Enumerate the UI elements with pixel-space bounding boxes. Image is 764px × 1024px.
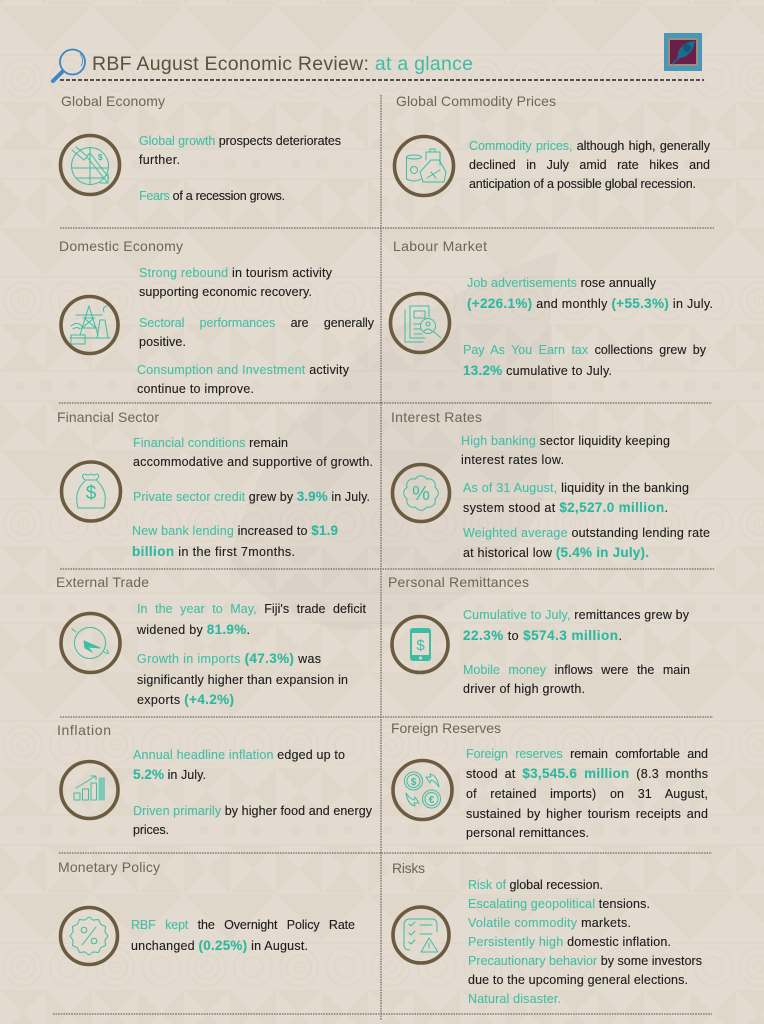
heading: inflation: Inflation xyxy=(57,722,111,738)
heading: financial sector: Financial Sector xyxy=(57,409,159,425)
icon: declining globe: $ xyxy=(98,153,103,162)
text: global commodity prices: declined in July amid rate hikes and xyxy=(469,158,710,172)
icon: money bag: $ xyxy=(86,483,97,504)
text: foreign reserves: personal remittances. xyxy=(466,826,589,840)
text: global economy: Global growth prospects deteriorates xyxy=(139,134,341,148)
text: domestic economy: positive. xyxy=(139,335,186,349)
text: global economy xyxy=(139,134,341,203)
panel: financial sector xyxy=(57,409,373,559)
text: inflation: Annual headline inflation edged up to xyxy=(133,748,345,762)
text: external trade: widened by 81.9%. xyxy=(136,622,250,637)
text: labour market xyxy=(463,276,713,378)
text: inflation: Driven primarily by higher food and energy xyxy=(133,804,373,818)
text: external trade: significantly higher than expansion in xyxy=(137,673,348,687)
text: financial sector: New bank lending increased to $1.9 xyxy=(132,523,338,538)
text: interest rates: interest rates low. xyxy=(461,453,564,467)
heading: personal remittances: Personal Remittances xyxy=(388,574,529,590)
text: financial sector: Financial conditions remain xyxy=(133,436,288,450)
text: risks: Precautionary behavior by some investors xyxy=(468,954,702,968)
text: interest rates xyxy=(461,434,710,560)
text: global commodity prices: anticipation of a possible global recession. xyxy=(469,177,696,191)
panel: inflation xyxy=(57,722,373,837)
heading: interest rates: Interest Rates xyxy=(391,409,482,425)
heading: global economy: Global Economy xyxy=(61,93,165,109)
text: foreign reserves: sustained by higher tourism receipts and xyxy=(466,807,708,821)
text: interest rates: system stood at $2,527.0 million. xyxy=(463,500,668,515)
heading: risks: Risks xyxy=(392,860,425,876)
text: risks: Persistently high domestic inflation. xyxy=(468,935,671,949)
text: risks: Volatile commodity markets. xyxy=(468,916,631,930)
text: external trade: Growth in imports (47.3%) was xyxy=(137,651,321,666)
text: global commodity prices: Commodity prices, although high, generally xyxy=(469,139,711,153)
icon: magnifying glass xyxy=(53,50,85,81)
text: interest rates: at historical low (5.4% in July). xyxy=(463,545,649,560)
icon: rising bar chart xyxy=(61,762,118,818)
text: risks: due to the upcoming general elections. xyxy=(468,973,688,987)
icon: commodities xyxy=(394,136,454,196)
heading: labour market: Labour Market xyxy=(393,238,487,254)
panel: domestic economy xyxy=(59,238,375,396)
panel: labour market xyxy=(390,238,713,378)
icon: percent badge: % xyxy=(412,483,430,505)
icon: plane around globe xyxy=(61,614,120,672)
icon: job search document xyxy=(390,294,450,352)
text: domestic economy: Strong rebound in tourism activity xyxy=(139,266,333,280)
icon: mobile money xyxy=(392,616,448,672)
text: financial sector: billion in the first 7months. xyxy=(132,544,295,559)
text: financial sector xyxy=(132,436,373,559)
text: labour market: 13.2% cumulative to July. xyxy=(463,363,612,378)
text: personal remittances: 22.3% to $574.3 million. xyxy=(463,628,622,643)
panel: personal remittances xyxy=(388,574,690,696)
text: risks: Risk of global recession. xyxy=(468,878,603,892)
text: interest rates: As of 31 August, liquidity in the banking xyxy=(463,481,689,495)
panel: foreign reserves xyxy=(391,720,708,840)
text: interest rates: High banking sector liquidity keeping xyxy=(461,434,670,448)
icon: money bag xyxy=(62,462,120,521)
text: personal remittances: driver of high growth. xyxy=(463,682,585,696)
text: inflation: 5.2% in July. xyxy=(133,767,206,782)
text: global economy: Fears of a recession grows. xyxy=(139,189,285,203)
icon: energy tower and laptop xyxy=(61,296,118,354)
text: monetary policy: unchanged (0.25%) in August. xyxy=(131,938,308,953)
text: financial sector: Private sector credit grew by 3.9% in July. xyxy=(133,489,370,504)
panel: global commodity prices xyxy=(394,93,711,196)
icon: currency exchange: € xyxy=(429,795,435,806)
panel: monetary policy xyxy=(58,859,355,964)
panel: global economy xyxy=(60,93,341,203)
text: domestic economy: Consumption and Investment activity xyxy=(137,363,350,377)
icon: percent seal xyxy=(60,908,118,964)
text: global economy: further. xyxy=(139,153,180,167)
heading: domestic economy: Domestic Economy xyxy=(59,238,183,254)
icon: mobile money: $ xyxy=(416,637,425,654)
logo xyxy=(664,33,702,71)
text: inflation xyxy=(133,748,373,837)
text: risks xyxy=(468,878,702,1006)
text: interest rates: Weighted average outstanding lending rate xyxy=(463,526,710,540)
text: financial sector: accommodative and supportive of growth. xyxy=(133,455,373,469)
text: inflation: prices. xyxy=(133,823,169,837)
icon: currency exchange xyxy=(393,760,452,820)
text: domestic economy: supporting economic recovery. xyxy=(139,285,312,299)
icon: declining globe xyxy=(60,136,120,194)
text: personal remittances xyxy=(463,608,690,696)
text: foreign reserves: of retained imports) on 31 August, xyxy=(466,787,708,801)
text: external trade xyxy=(136,602,367,707)
icon: currency exchange: $ xyxy=(411,777,417,788)
text: monetary policy: RBF kept the Overnight Policy Rate xyxy=(131,918,355,932)
text: personal remittances: Cumulative to July, remittances grew by xyxy=(463,608,690,622)
text: foreign reserves: Foreign reserves remain comfortable and xyxy=(466,747,708,761)
text: domestic economy xyxy=(137,266,375,396)
text: monetary policy xyxy=(131,918,355,953)
text: labour market: (+226.1%) and monthly (+55.3%) in July. xyxy=(467,296,713,311)
title: RBF August Economic Review: at a glance xyxy=(92,53,473,75)
text: external trade: In the year to May, Fiji's trade deficit xyxy=(137,602,367,616)
text: foreign reserves: stood at $3,545.6 million (8.3 months xyxy=(466,766,708,781)
icon: checklist with warning xyxy=(393,907,449,963)
text: risks: Natural disaster. xyxy=(468,992,561,1006)
header rule xyxy=(60,79,704,81)
text: external trade: exports (+4.2%) xyxy=(137,692,234,707)
heading: foreign reserves: Foreign Reserves xyxy=(391,720,501,736)
text: risks: Escalating geopolitical tensions. xyxy=(468,897,650,911)
text: labour market: Job advertisements rose annually xyxy=(467,276,657,290)
text: domestic economy: Sectoral performances are generally xyxy=(139,316,375,330)
panel: interest rates xyxy=(391,409,710,560)
icon: percent badge xyxy=(392,464,450,522)
text: labour market: Pay As You Earn tax collections grew by xyxy=(463,343,707,357)
panel: external trade xyxy=(56,574,367,707)
heading: monetary policy: Monetary Policy xyxy=(58,859,160,875)
text: domestic economy: continue to improve. xyxy=(137,382,254,396)
text: foreign reserves xyxy=(466,747,708,840)
panel: risks xyxy=(392,860,702,1006)
heading: external trade: External Trade xyxy=(56,574,149,590)
text: global commodity prices xyxy=(469,139,711,191)
text: personal remittances: Mobile money inflows were the main xyxy=(463,663,690,677)
heading: global commodity prices: Global Commodity Prices xyxy=(396,93,556,109)
